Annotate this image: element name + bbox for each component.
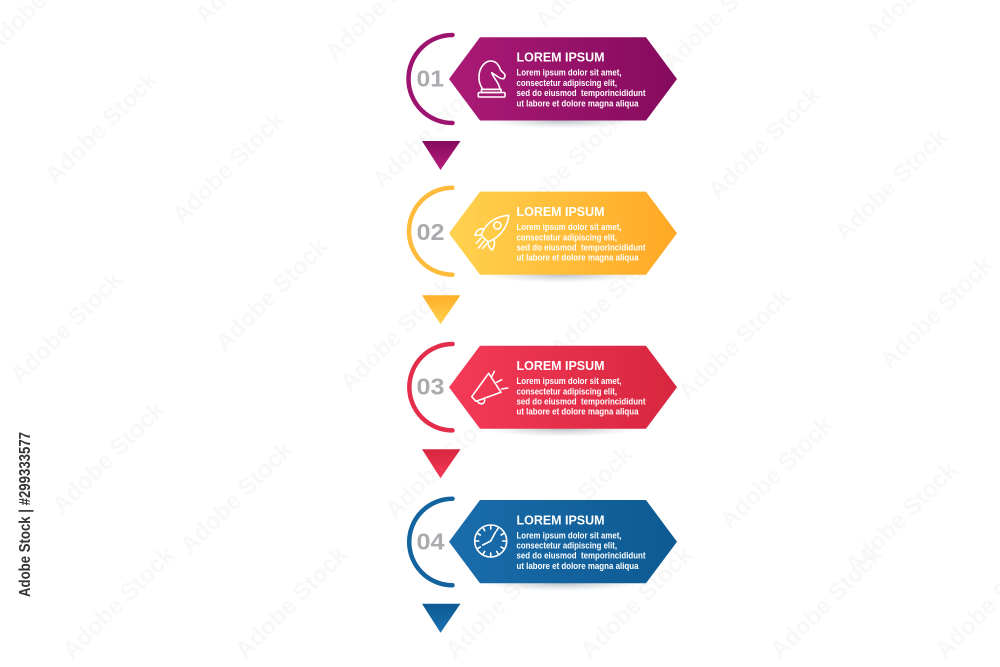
watermark pattern: Adobe Stock	[40, 66, 163, 189]
arrow 02	[422, 295, 460, 324]
icon: chess knight	[478, 61, 505, 97]
step 03 body text: sed do eiusmod temporincididunt	[516, 396, 646, 406]
watermark pattern: Adobe Stock	[765, 541, 888, 664]
watermark pattern: Adobe Stock	[5, 266, 128, 389]
step 01 body text: sed do eiusmod temporincididunt	[516, 88, 646, 98]
step 02 arc	[409, 188, 452, 275]
step 04 title: LOREM IPSUM	[516, 512, 604, 527]
step 01 body text: Lorem ipsum dolor sit amet,	[516, 68, 622, 78]
watermark pattern: Adobe Stock	[335, 273, 458, 396]
icon: megaphone	[472, 371, 508, 404]
step 03 hexagon	[449, 346, 677, 429]
step 01 title: LOREM IPSUM	[516, 50, 604, 65]
watermark pattern: Adobe Stock	[830, 123, 953, 246]
step 02 hexagon	[449, 192, 677, 275]
step 04 body text: ut labore et dolore magna aliqua	[516, 561, 639, 571]
step 02 body text	[516, 222, 646, 263]
watermark pattern: Adobe Stock	[875, 251, 998, 374]
step 03 shadow	[484, 421, 640, 437]
step 04 body text: sed do eiusmod temporincididunt	[516, 551, 646, 561]
step 03 body text	[516, 376, 646, 417]
step 03 body text: ut labore et dolore magna aliqua	[516, 407, 639, 417]
step 04 body text	[516, 530, 646, 571]
step 01 body text	[516, 68, 646, 108]
watermark pattern: Adobe Stock	[575, 541, 698, 664]
step 02 body text: ut labore et dolore magna aliqua	[516, 253, 639, 263]
step 03 number: 03	[416, 373, 444, 399]
step 02 number: 02	[416, 219, 444, 245]
watermark pattern: Adobe Stock	[380, 401, 503, 524]
step 01 number: 01	[416, 66, 444, 92]
step 02	[409, 188, 677, 283]
step 01 body text: consectetur adipiscing elit,	[516, 78, 617, 88]
step 02 body text: consectetur adipiscing elit,	[516, 232, 617, 242]
icon: clock	[475, 525, 507, 557]
arrow 03	[422, 449, 460, 478]
watermark pattern: Adobe Stock	[175, 436, 298, 559]
watermark pattern: Adobe Stock	[167, 106, 290, 229]
step 02 shadow	[484, 267, 640, 283]
step 01 arc	[408, 35, 452, 123]
watermark pattern: Adobe Stock	[57, 541, 180, 664]
icon: rocket	[475, 215, 509, 250]
step 02 body text: Lorem ipsum dolor sit amet,	[516, 222, 622, 232]
arrow 01	[422, 141, 460, 170]
step 02 body text: sed do eiusmod temporincididunt	[516, 242, 646, 252]
watermark pattern: Adobe Stock	[840, 456, 963, 579]
step 03 body text: consectetur adipiscing elit,	[516, 386, 617, 396]
watermark pattern: Adobe Stock	[715, 411, 838, 534]
arrow 04	[422, 604, 460, 633]
watermark pattern: Adobe Stock	[703, 81, 826, 204]
step 02 title: LOREM IPSUM	[516, 204, 604, 219]
watermark pattern: Adobe Stock	[673, 283, 796, 406]
watermark pattern: Adobe Stock	[505, 106, 628, 229]
step 04 body text: Lorem ipsum dolor sit amet,	[516, 530, 622, 540]
step 01 shadow	[484, 112, 640, 128]
watermark pattern: Adobe Stock	[230, 541, 353, 664]
watermark pattern: Adobe Stock	[47, 396, 170, 519]
step 04 shadow	[484, 575, 640, 591]
step 03 body text: Lorem ipsum dolor sit amet,	[516, 376, 622, 386]
step 04 hexagon	[449, 500, 677, 583]
watermark pattern: Adobe Stock	[545, 239, 668, 362]
watermark pattern: Adobe Stock	[210, 233, 333, 356]
step 03 title: LOREM IPSUM	[516, 358, 604, 373]
step 04 number: 04	[416, 528, 445, 554]
step 01 body text: ut labore et dolore magna aliqua	[516, 98, 639, 108]
watermark pattern: Adobe Stock	[367, 71, 490, 194]
step 01 hexagon	[449, 37, 677, 120]
step 03 arc	[409, 344, 452, 430]
watermark pattern: Adobe Stock	[515, 441, 638, 564]
step 03	[409, 344, 677, 437]
stock id side text: Adobe Stock | #299333577	[17, 432, 34, 597]
step 04 body text: consectetur adipiscing elit,	[516, 541, 617, 551]
step 04 arc	[409, 499, 452, 585]
step 04	[409, 499, 677, 591]
watermark pattern: Adobe Stock	[440, 541, 563, 664]
step 01	[408, 35, 677, 128]
